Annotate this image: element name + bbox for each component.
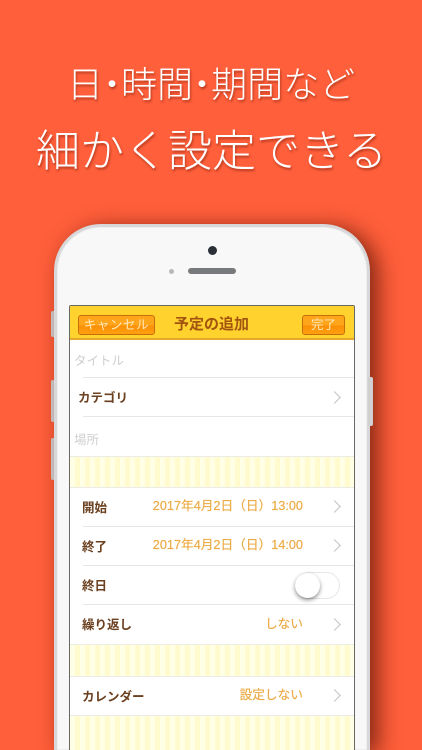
- end row: 2017年4月2日（日）14:00: [153, 538, 303, 552]
- nav bar: [70, 306, 354, 340]
- cancel button: キャンセル: [84, 318, 149, 332]
- calendar row: 設定しない: [240, 688, 303, 702]
- done button: 完了: [311, 318, 336, 332]
- title field: タイトル: [74, 354, 124, 368]
- place field: 場所: [74, 433, 99, 447]
- stripe band 3: [70, 715, 354, 750]
- repeat row: 繰り返し: [82, 618, 132, 632]
- start row: 開始: [82, 501, 107, 515]
- nav title: 予定の追加: [174, 316, 249, 333]
- category row: カテゴリ: [78, 391, 128, 405]
- end row: [82, 538, 341, 554]
- calendar row: [82, 688, 341, 704]
- sensor dot: [169, 269, 174, 274]
- title line 2: 細かく設定できる: [36, 127, 387, 176]
- all-day row: 終日: [82, 579, 107, 593]
- category row: [78, 390, 341, 405]
- all-day row: [82, 572, 340, 603]
- repeat row: [82, 617, 341, 632]
- repeat row: しない: [265, 617, 303, 631]
- start row: [82, 498, 341, 515]
- speaker: [188, 268, 236, 274]
- done button: [302, 315, 345, 335]
- screen: [69, 305, 355, 750]
- cancel button: [78, 315, 155, 335]
- stripe band 2: [70, 644, 354, 677]
- side buttons: [51, 311, 55, 337]
- calendar row: カレンダー: [82, 690, 145, 704]
- start row: 2017年4月2日（日）13:00: [153, 499, 303, 513]
- camera: [208, 246, 217, 255]
- phone body: [54, 224, 370, 750]
- stripe band 1: [70, 456, 354, 488]
- toggle: [295, 572, 340, 599]
- end row: 終了: [82, 540, 107, 554]
- title line 1: 日・時間・期間など: [67, 64, 355, 105]
